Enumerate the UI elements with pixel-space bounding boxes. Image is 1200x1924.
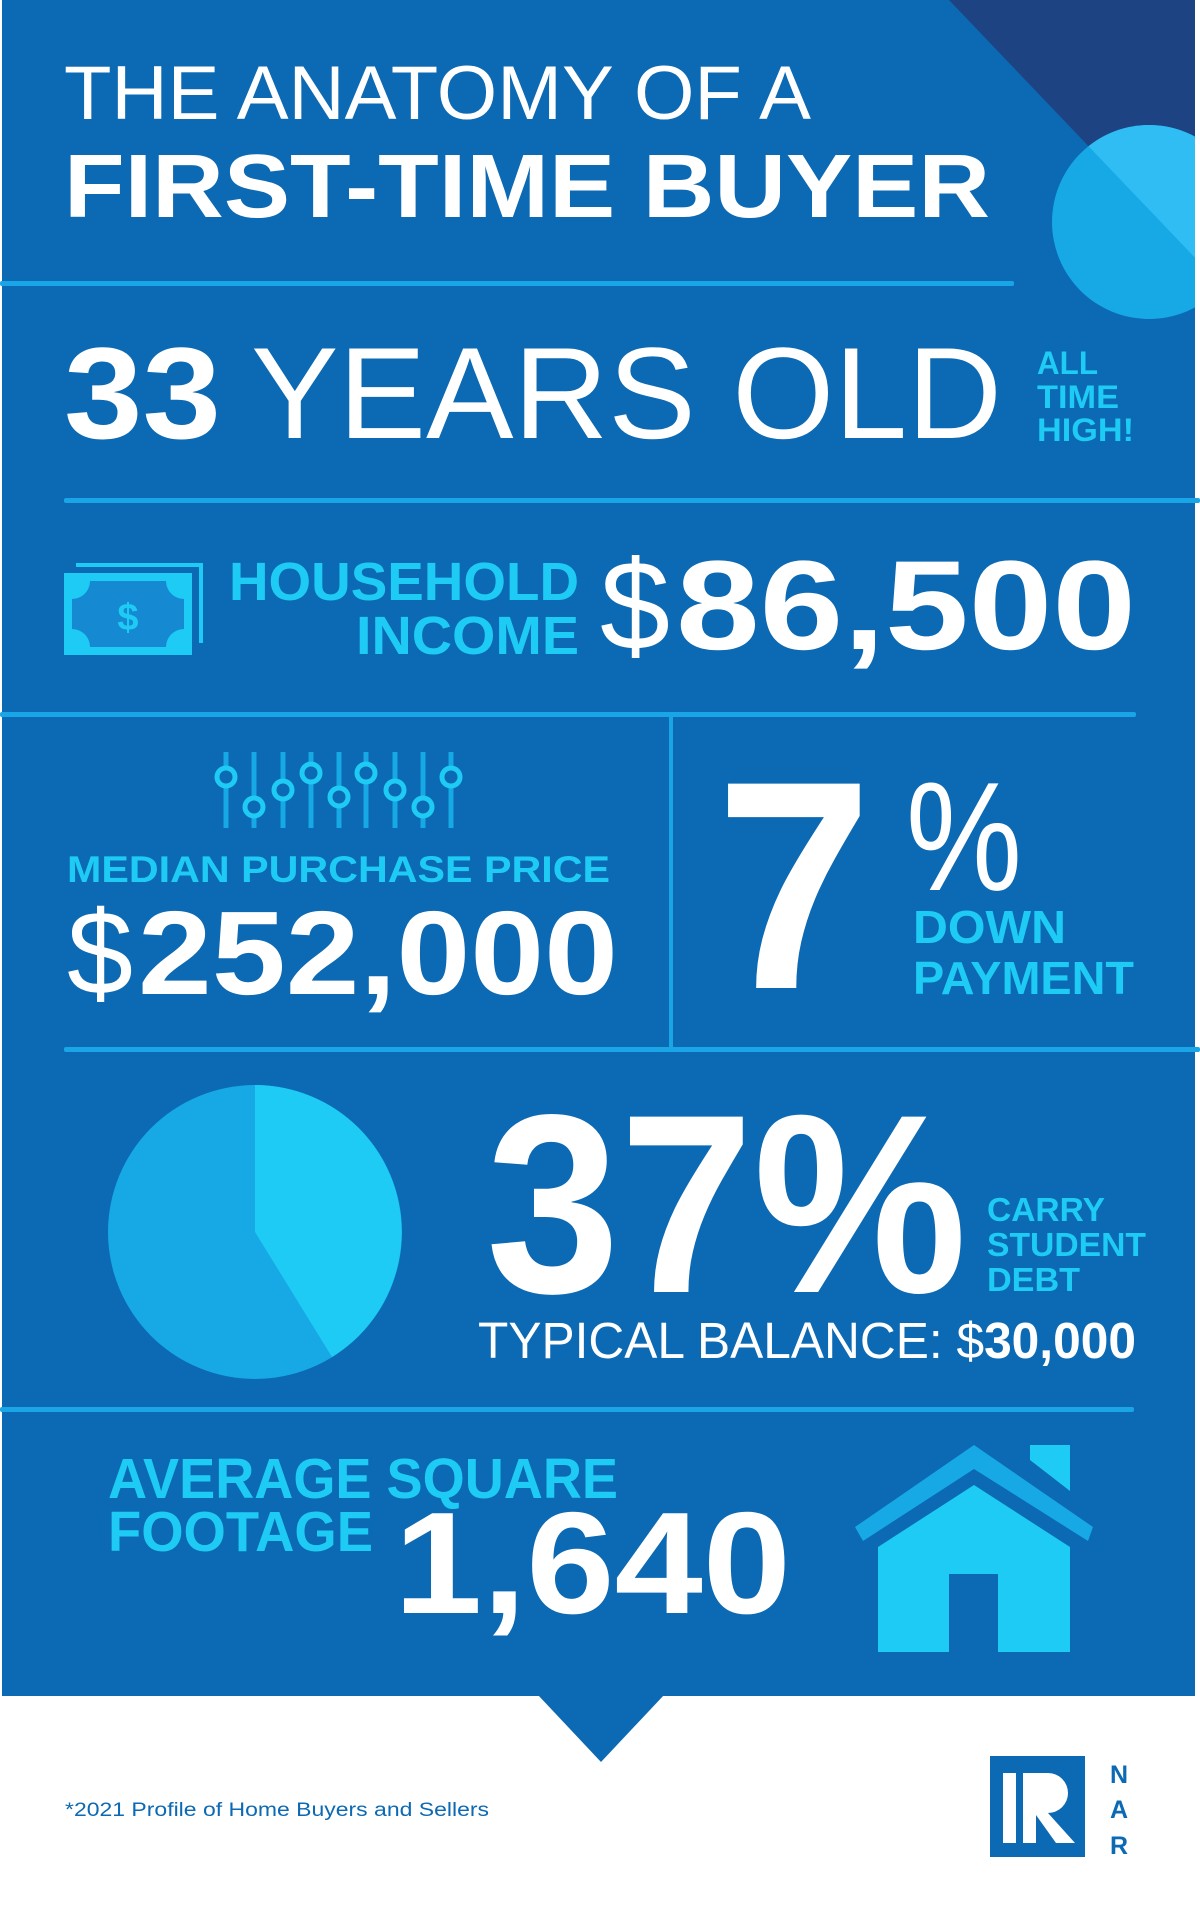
title: THE ANATOMY OF A bbox=[64, 51, 811, 136]
title bbox=[64, 51, 990, 237]
logo: NAR bbox=[990, 1756, 1128, 1860]
down payment bbox=[716, 719, 1134, 1051]
household income: 86,500 bbox=[676, 534, 1136, 676]
age stat: TIME bbox=[1037, 379, 1119, 415]
square footage: 1,640 bbox=[394, 1482, 791, 1644]
down payment: DOWN bbox=[913, 901, 1066, 953]
icon: equalizer bbox=[217, 752, 460, 828]
student debt stat: STUDENT bbox=[987, 1226, 1146, 1263]
student debt stat: TYPICAL BALANCE: $30,000 bbox=[478, 1312, 1136, 1369]
student debt stat: CARRY bbox=[987, 1191, 1105, 1228]
square footage: FOOTAGE bbox=[108, 1500, 373, 1564]
median purchase price: $ bbox=[67, 887, 133, 1020]
icon: house bbox=[855, 1445, 1093, 1652]
logo: NAR: R bbox=[1110, 1832, 1128, 1860]
household income: INCOME bbox=[356, 606, 579, 666]
median purchase price bbox=[67, 849, 618, 1020]
down payment: PAYMENT bbox=[913, 952, 1134, 1004]
age stat bbox=[64, 320, 1134, 466]
decoration: top right triangle and circle bbox=[949, 0, 1200, 319]
icon: money: $ bbox=[117, 597, 139, 639]
age stat: ALL bbox=[1037, 345, 1098, 381]
down payment: 7 bbox=[716, 719, 872, 1051]
household income: $ bbox=[600, 534, 670, 676]
footnote: *2021 Profile of Home Buyers and Sellers bbox=[65, 1800, 489, 1821]
square footage bbox=[108, 1447, 791, 1644]
student debt stat: DEBT bbox=[987, 1261, 1080, 1298]
household income: HOUSEHOLD bbox=[229, 552, 579, 612]
pie chart: student debt bbox=[108, 1085, 402, 1379]
age stat: 33 bbox=[64, 320, 221, 466]
age stat: HIGH! bbox=[1037, 412, 1134, 448]
student debt stat: 37% bbox=[486, 1062, 967, 1347]
logo: NAR: A bbox=[1110, 1796, 1128, 1824]
icon: money bbox=[64, 563, 203, 655]
median purchase price: MEDIAN PURCHASE PRICE bbox=[67, 849, 610, 890]
down payment: % bbox=[906, 750, 1022, 923]
household income bbox=[229, 534, 1136, 676]
square footage: AVERAGE SQUARE bbox=[108, 1447, 618, 1511]
age stat: YEARS OLD bbox=[251, 320, 1002, 466]
title: FIRST-TIME BUYER bbox=[64, 137, 990, 237]
median purchase price: 252,000 bbox=[138, 887, 618, 1020]
logo: NAR: N bbox=[1110, 1761, 1128, 1789]
